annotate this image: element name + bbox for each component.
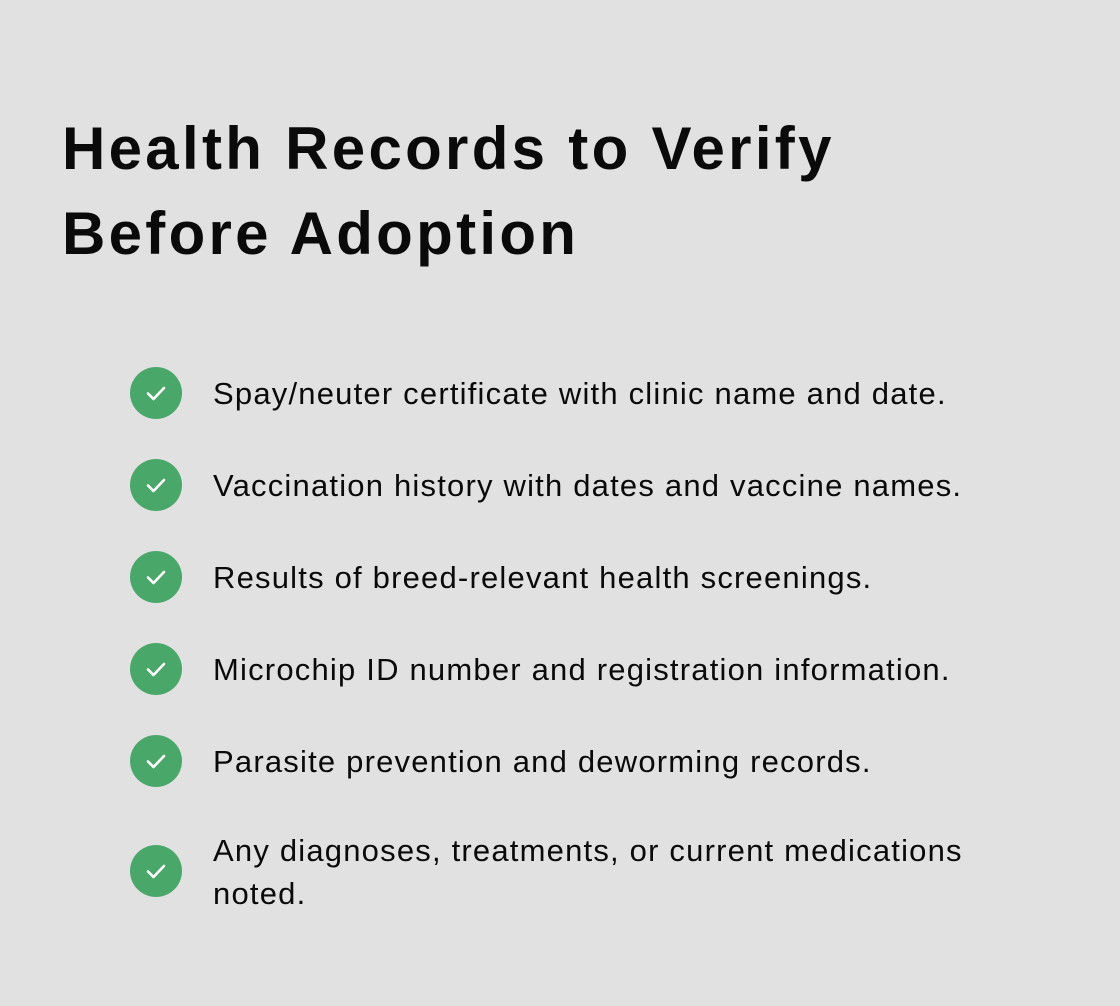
text: parasite: Parasite prevention and deworming records. xyxy=(213,744,872,779)
icon: check xyxy=(130,551,182,603)
list item 4 xyxy=(130,643,951,695)
list item 5 xyxy=(130,735,872,787)
title: Health Records to Verify xyxy=(62,115,835,182)
icon: check xyxy=(130,735,182,787)
text: microchip: Microchip ID number and registration information. xyxy=(213,652,951,687)
text: diagnoses: noted. xyxy=(213,876,306,911)
title xyxy=(62,115,835,267)
list item 6 xyxy=(130,833,963,911)
icon: check xyxy=(130,367,182,419)
icon: check xyxy=(130,845,182,897)
text: diagnoses xyxy=(213,833,963,911)
title: Before Adoption xyxy=(62,200,579,267)
text: vaccination: Vaccination history with dates and vaccine names. xyxy=(213,468,962,503)
text: spay/neuter: Spay/neuter certificate with clinic name and date. xyxy=(213,376,947,411)
text: diagnoses: Any diagnoses, treatments, or current medications xyxy=(213,833,963,868)
text: screenings: Results of breed-relevant health screenings. xyxy=(213,560,872,595)
list item 2 xyxy=(130,459,962,511)
list item 1 xyxy=(130,367,947,419)
list item 3 xyxy=(130,551,872,603)
icon: check xyxy=(130,643,182,695)
icon: check xyxy=(130,459,182,511)
